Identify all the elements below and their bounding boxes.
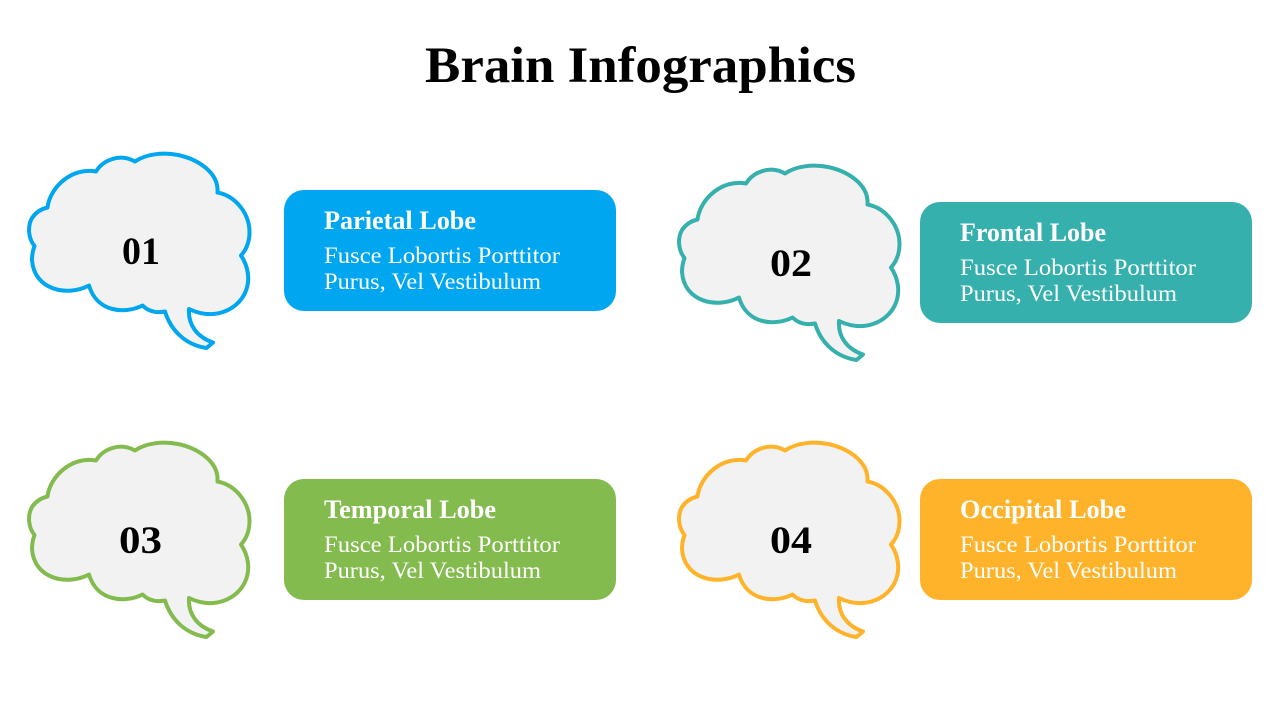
icon: brain speech bubble 03: 03 [119, 519, 162, 562]
card: frontal lobe text: Fusce Lobortis Porttitor [960, 255, 1196, 281]
card: occipital lobe text: Fusce Lobortis Porttitor [960, 532, 1196, 558]
card: temporal lobe text: Fusce Lobortis Porttitor [324, 532, 560, 558]
card: occipital lobe text: Occipital Lobe [960, 495, 1126, 524]
card: frontal lobe text: Purus, Vel Vestibulum [960, 281, 1177, 307]
panel: parietal lobe [29, 154, 616, 348]
panel: temporal lobe [29, 443, 616, 637]
card: parietal lobe text: Purus, Vel Vestibulum [324, 269, 541, 295]
icon: brain speech bubble 01: 01 [122, 230, 160, 273]
title: Brain Infographics [425, 38, 856, 94]
card: occipital lobe text [920, 479, 1252, 600]
icon: brain speech bubble 01 [29, 154, 250, 348]
icon: brain speech bubble 02: 02 [770, 242, 812, 285]
icon: brain speech bubble 03 [29, 443, 250, 637]
card: temporal lobe text: Temporal Lobe [324, 495, 496, 524]
icon: brain speech bubble 04 [679, 443, 900, 637]
card: frontal lobe text: Frontal Lobe [960, 218, 1106, 247]
card: parietal lobe text: Parietal Lobe [324, 206, 476, 235]
card: temporal lobe text [284, 479, 616, 600]
card: parietal lobe text [284, 190, 616, 311]
icon: brain speech bubble 02 [679, 166, 900, 360]
card: parietal lobe text: Fusce Lobortis Porttitor [324, 243, 560, 269]
panel: occipital lobe [679, 443, 1252, 637]
panel: frontal lobe [679, 166, 1252, 360]
card: temporal lobe text: Purus, Vel Vestibulum [324, 558, 541, 584]
card: occipital lobe text: Purus, Vel Vestibulum [960, 558, 1177, 584]
icon: brain speech bubble 04: 04 [770, 519, 812, 562]
card: frontal lobe text [920, 202, 1252, 323]
